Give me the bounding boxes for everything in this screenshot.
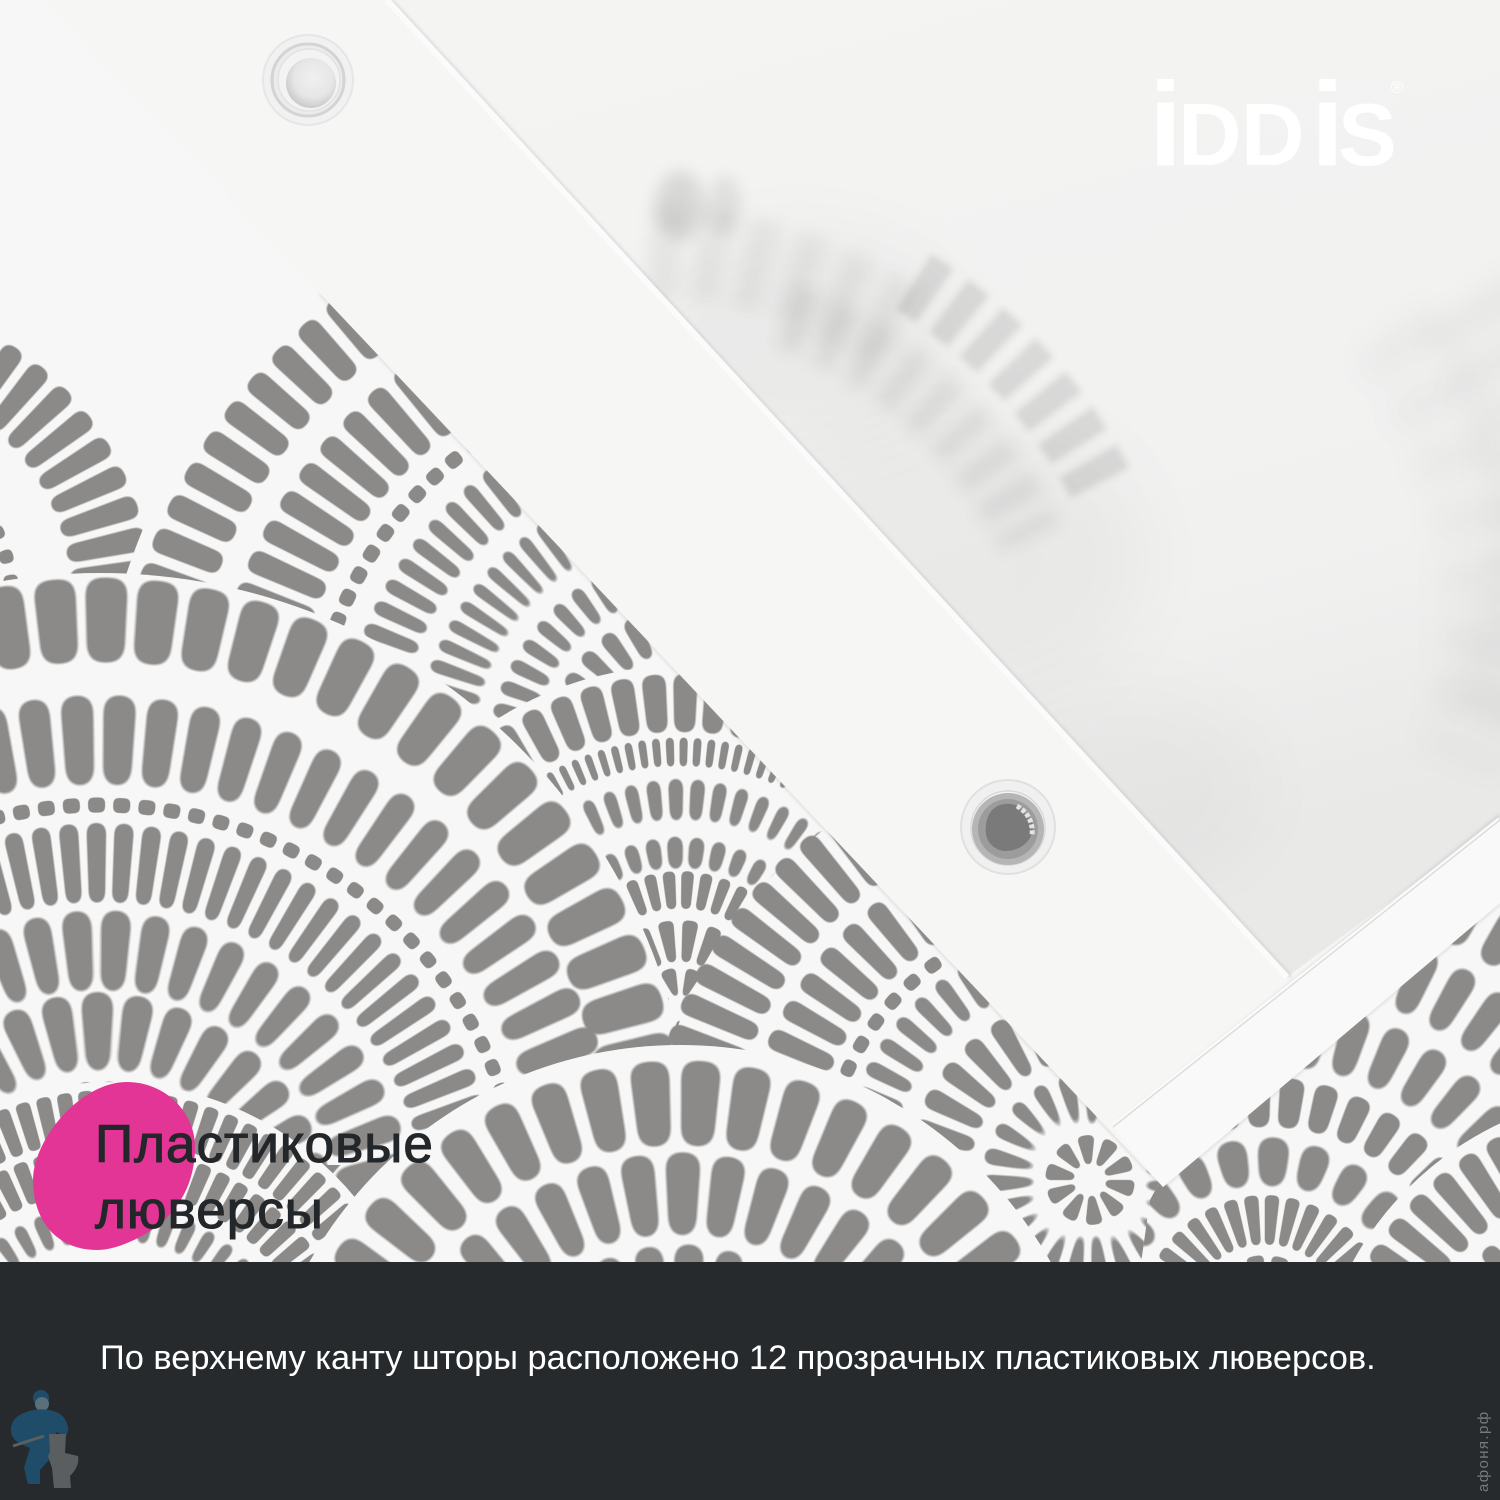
logo: iDDiS: D [1241,85,1305,184]
logo: iDDiS [1149,58,1404,191]
logo: iDDiS: S [1338,85,1397,184]
description text: По верхнему канту шторы расположено 12 прозрачных пластиковых люверсов. [100,1339,1376,1377]
heading: plastic grommets [94,1115,434,1240]
heading: plastic grommets: люверсы [95,1181,324,1240]
icon: plumber with toilet [11,1390,78,1488]
curtain hem band [43,0,1500,1187]
logo: iDDiS: D [1178,85,1242,184]
logo: iDDiS: ® [1391,78,1404,97]
heading: plastic grommets: Пластиковые [95,1115,434,1174]
fan: upper [97,157,1303,1363]
fan: right behind hem corner [650,740,1500,1446]
fan: centre small [338,666,1022,1350]
hem seams [387,0,1500,1127]
fan: bottom left small [0,1082,428,1400]
translucent upper panel [387,0,1500,977]
watermark: site name: афоня.рф [1475,1411,1492,1492]
fan: lower right [1142,914,1500,1262]
logo: iDDiS: i [1149,58,1182,191]
grommet: lower [961,780,1055,874]
grommet: top [263,35,353,125]
pink accent blob [33,1082,195,1250]
lower hem seam [1113,820,1500,1127]
dark footer bar [0,1262,1500,1500]
seam shadows [391,0,1500,1122]
hem fold strip [1113,823,1500,1187]
patterned fabric: scalloped fans of grey petals [0,303,1500,1262]
show-through pattern shadows [649,168,1500,724]
logo: iDDiS: i [1311,58,1344,191]
fan: bottom centre large [255,1045,1105,1470]
fan: far left [0,338,112,862]
hem shadow edge [320,293,1500,1187]
fan: far lower right [1312,1092,1500,1420]
fan: large left [0,573,692,1230]
